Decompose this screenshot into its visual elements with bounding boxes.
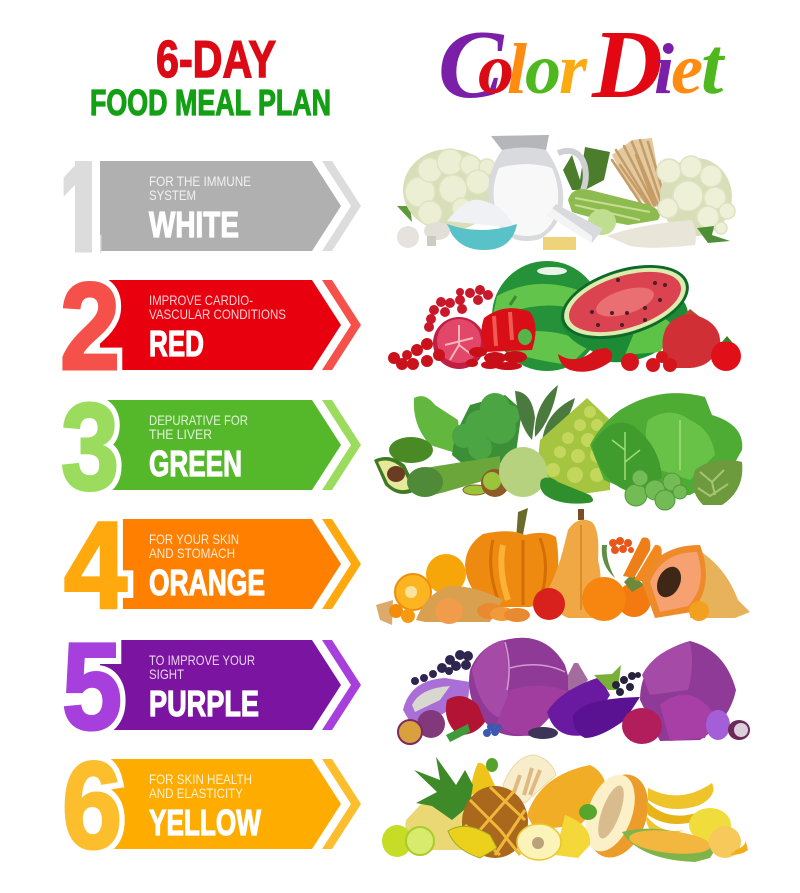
zucchini	[568, 189, 660, 235]
food group: purple foods	[398, 638, 750, 744]
goji berries	[466, 347, 527, 370]
asparagus	[407, 456, 500, 497]
left red cabbage	[469, 638, 572, 736]
step 4: orange	[64, 498, 361, 635]
kiwi	[463, 469, 509, 497]
squash and papaya	[642, 545, 750, 621]
step 5: purple: SIGHT	[149, 666, 184, 682]
step 2: red: VASCULAR CONDITIONS	[149, 306, 286, 322]
large yellow pomelo	[405, 797, 465, 850]
left cauliflower	[397, 149, 495, 231]
leaves	[563, 147, 610, 190]
pomegranate and tomato	[662, 309, 741, 371]
right red cabbage	[640, 641, 736, 741]
step 3: green: DEPURATIVE FOR	[149, 412, 248, 428]
step 3: green: 3	[61, 379, 119, 516]
kohlrabi	[499, 447, 547, 497]
romanesco	[537, 398, 610, 495]
step 4: orange: 4	[64, 498, 127, 635]
title: color diet script: t	[701, 23, 726, 111]
step 4: orange: 4	[64, 498, 127, 635]
title: color diet script	[438, 11, 726, 119]
title: color diet script: o	[478, 29, 514, 109]
pineapple	[462, 786, 528, 858]
artichoke	[693, 460, 742, 505]
step 2: red: 2	[60, 259, 120, 396]
title: color diet script: C	[438, 11, 505, 119]
step 1: white	[52, 140, 361, 277]
title: 6-day food meal plan	[90, 31, 331, 123]
fig	[568, 663, 588, 690]
star fruit	[448, 826, 497, 858]
step 5: purple: 5	[62, 619, 122, 756]
large melon	[527, 765, 606, 830]
eggplants	[547, 665, 640, 738]
step 1: white: FOR THE IMMUNE	[149, 173, 251, 189]
lettuce	[414, 396, 462, 455]
tofu bar	[547, 204, 603, 243]
title: color diet script: i	[654, 29, 674, 109]
black currants center	[612, 672, 641, 696]
purple plum and slice	[706, 710, 750, 740]
cut melon	[576, 766, 659, 866]
cut watermelon	[552, 251, 698, 362]
step 6: yellow: 6	[62, 738, 122, 875]
step 2: red	[60, 259, 361, 396]
title: 6-day food meal plan: 6-DAY	[156, 31, 276, 89]
step 6: yellow: FOR SKIN HEALTH	[149, 771, 252, 787]
avocado	[374, 437, 433, 494]
cheese piece	[543, 237, 576, 250]
rowan clusters	[424, 285, 493, 332]
brussels sprouts	[625, 470, 687, 510]
step 5: purple: 5	[62, 619, 122, 756]
step 1: white: 1	[60, 140, 102, 277]
step 4: orange: ORANGE	[149, 562, 265, 603]
step 4: orange: FOR YOUR SKIN	[149, 531, 239, 547]
red onion	[622, 708, 662, 744]
sweet potato and slices	[416, 586, 530, 624]
food group: red foods	[388, 251, 741, 372]
step 3: green: GREEN	[149, 443, 242, 484]
butternut squash	[548, 509, 608, 618]
pineapple crown	[414, 757, 473, 820]
corn	[622, 827, 715, 862]
orange whole and slice	[395, 554, 466, 610]
bowl of cottage cheese	[447, 200, 517, 250]
step 5: purple: TO IMPROVE YOUR	[149, 652, 255, 668]
small berries right	[621, 351, 677, 372]
title: color diet script: e	[671, 29, 703, 109]
savoy cabbage	[590, 393, 742, 495]
daikon	[607, 220, 730, 248]
step 6: yellow	[62, 738, 361, 875]
jug of milk	[488, 135, 586, 241]
food group: orange foods	[376, 508, 750, 625]
black berries	[411, 650, 473, 685]
food group: yellow foods	[382, 755, 748, 866]
red pepper	[481, 296, 536, 352]
title: 6-day food meal plan: FOOD MEAL PLAN	[90, 82, 331, 123]
spinach leaves	[515, 385, 575, 442]
step 3: green: 3	[61, 379, 119, 516]
step 5: purple: PURPLE	[149, 683, 259, 724]
blueberries and dark berries	[483, 723, 558, 739]
step 3: green	[61, 379, 361, 516]
lemon	[689, 808, 731, 842]
broccoli	[452, 393, 522, 470]
bananas	[646, 783, 714, 838]
title: color diet script: r	[559, 29, 588, 109]
step 6: yellow: AND ELASTICITY	[149, 785, 244, 801]
step 6: yellow: YELLOW	[149, 802, 261, 843]
step 3: green: THE LIVER	[149, 426, 212, 442]
tangerine	[709, 826, 748, 858]
title: color diet script: l	[507, 29, 527, 109]
lime and slice	[382, 825, 434, 857]
currants bottom left	[388, 338, 445, 370]
food group: green foods	[374, 385, 742, 510]
step 2: red: RED	[149, 323, 204, 364]
mushrooms	[397, 222, 450, 248]
plum and passion fruit	[398, 710, 470, 744]
step 2: red: 2	[60, 259, 120, 396]
beet	[446, 696, 485, 735]
persimmons	[582, 574, 651, 621]
cut pomegranate	[433, 317, 485, 369]
quince half and pear	[517, 804, 597, 860]
title: color diet script: D	[591, 11, 663, 119]
rowan and carrots	[602, 537, 662, 582]
step 4: orange: AND STOMACH	[149, 545, 235, 561]
enoki mushrooms	[612, 138, 664, 208]
step 1: white: SYSTEM	[149, 187, 196, 203]
dragon fruit	[403, 678, 470, 722]
food group: white foods	[397, 135, 735, 250]
step 6: yellow: 6	[62, 738, 122, 875]
cucumber	[540, 477, 593, 504]
step 5: purple	[62, 619, 361, 756]
pumpkin	[465, 508, 558, 607]
apple	[533, 588, 565, 620]
whole watermelon	[492, 261, 602, 371]
physalis	[376, 600, 415, 625]
right cauliflower	[657, 156, 735, 236]
step 2: red: IMPROVE CARDIO-	[149, 292, 253, 308]
pear	[470, 758, 498, 795]
pomelo half	[503, 755, 556, 803]
chili pepper	[558, 348, 612, 372]
title: color diet script: o	[525, 29, 561, 109]
step 1: white: WHITE	[149, 204, 239, 245]
